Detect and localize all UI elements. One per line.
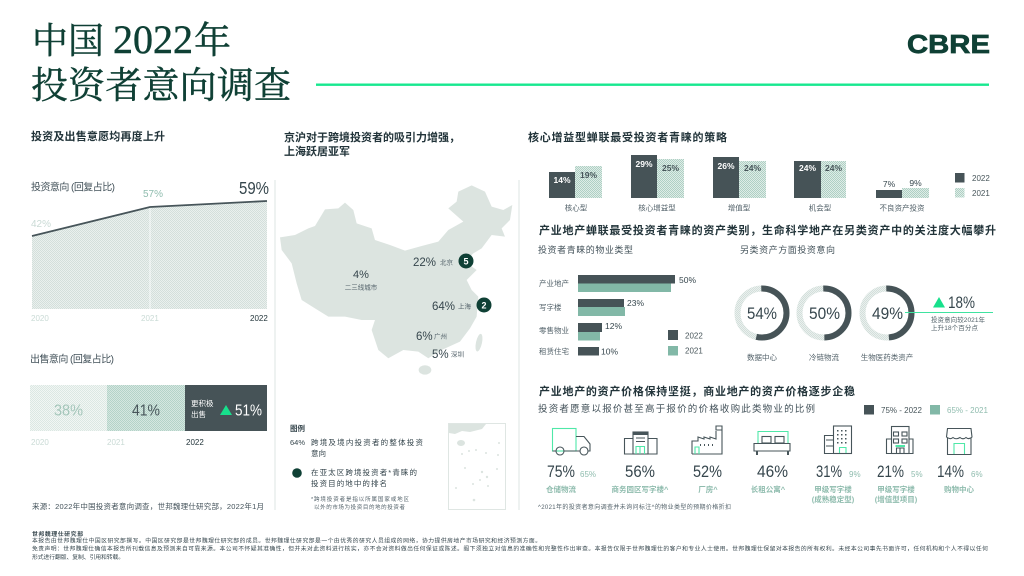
stat: grade A office core bbox=[812, 463, 861, 504]
bar chart: strategies: 9% bbox=[909, 178, 922, 188]
heading: map panel bbox=[284, 130, 460, 158]
icon: truck bbox=[552, 428, 590, 455]
subheading: alternative assets: 另类资产方面投资意向 bbox=[740, 244, 835, 255]
stat: factory: 厂房^ bbox=[698, 484, 718, 494]
map label: Beijing bbox=[413, 254, 474, 269]
map legend: 意向 bbox=[311, 448, 326, 458]
bar chart: property types: 产业地产 bbox=[539, 278, 569, 288]
bar chart: strategies: 25% bbox=[662, 163, 679, 173]
chart label: investment intent: 投资意向 (回复占比) bbox=[31, 180, 115, 194]
heading: asset classes: 产业地产蝉联最受投资者青睐的资产类别，生命科学地产在另类资产中的关注度大幅攀升 bbox=[539, 223, 996, 237]
legend: price discount: 65% - 2021 bbox=[947, 406, 988, 415]
donut: cold chain: 冷链物流 bbox=[809, 352, 839, 362]
panel: investment and sale intent bbox=[30, 129, 269, 447]
heading: investment and sale intent: 投资及出售意愿均再度上升 bbox=[31, 129, 165, 143]
segmented bar: sale intent: 2020 bbox=[31, 438, 49, 447]
callout: 18 percentage points: 18% bbox=[948, 294, 975, 312]
donut: life sciences: 生物医药类资产 bbox=[861, 352, 913, 362]
stat: business park office: 56% bbox=[625, 463, 655, 481]
legend: strategies bbox=[955, 173, 990, 198]
stat: warehouse bbox=[546, 463, 596, 494]
bar chart: strategies: 增值型 bbox=[728, 202, 751, 212]
map legend: 跨境及境内投资者的整体投资 bbox=[311, 437, 424, 447]
footer disclaimer: 形式进行翻版、复制、引用和转载。 bbox=[32, 553, 124, 561]
donut: data centre bbox=[738, 288, 786, 362]
stat: grade A office value-add: 5% bbox=[911, 470, 923, 479]
logo: CBRE: CBRE bbox=[907, 29, 990, 59]
stat: warehouse: 75% bbox=[547, 463, 575, 481]
icon: apartment bed bbox=[754, 432, 790, 455]
icon: shopping mall bbox=[946, 428, 972, 454]
bar chart: strategies: 核心型 bbox=[565, 202, 588, 212]
title: 2022 bbox=[113, 17, 193, 62]
segmented bar: sale intent: 41% bbox=[132, 402, 160, 420]
map legend bbox=[290, 423, 424, 511]
bar chart: strategies: 24% bbox=[825, 163, 842, 173]
stat: shopping mall: 6% bbox=[971, 470, 983, 479]
map label: Guangzhou: 6% bbox=[416, 331, 433, 343]
map label: tier 2/3 cities bbox=[345, 269, 378, 292]
map inset: South China Sea bbox=[448, 424, 506, 510]
callout: 18 percentage points: 上升18个百分点 bbox=[931, 323, 978, 332]
stat: long-stay apartment: 46% bbox=[757, 463, 788, 481]
area chart: investment intent bbox=[31, 178, 269, 323]
heading: price discount: 产业地产的资产价格保持坚挺，商业地产的资产价格逐步企稳 bbox=[539, 384, 855, 398]
area chart: investment intent: 42% bbox=[31, 219, 51, 230]
header rule bbox=[316, 84, 989, 86]
stat: grade A office core: 9% bbox=[849, 470, 861, 479]
legend: price discount: 75% - 2022 bbox=[881, 406, 922, 415]
source note: 来源：2022年中国投资者意向调查，世邦魏理仕研究部，2022年1月 bbox=[32, 501, 264, 511]
area chart: investment intent: 2020 bbox=[31, 314, 49, 323]
bar chart: strategies: 机会型 bbox=[809, 202, 832, 212]
segmented bar: sale intent: 2021 bbox=[107, 438, 125, 447]
area chart: investment intent: 2022 bbox=[250, 314, 268, 323]
panel: price discount bbox=[538, 384, 988, 511]
legend: strategies: 2021 bbox=[972, 189, 990, 198]
segmented bar: sale intent bbox=[30, 385, 267, 447]
stat: shopping mall bbox=[937, 463, 983, 494]
map legend: 投资目的地中的排名 bbox=[311, 478, 387, 488]
bar chart: strategies: 7% bbox=[883, 179, 896, 189]
bar chart: property types: 租赁住宅 bbox=[539, 346, 569, 356]
heading: strategies: 核心增益型蝉联最受投资者青睐的策略 bbox=[528, 130, 727, 144]
bar chart: property types: 12% bbox=[605, 321, 622, 331]
panel: asset classes bbox=[538, 223, 996, 362]
chart label: sale intent: 出售意向 (回复占比) bbox=[30, 352, 114, 366]
stat: business park office bbox=[612, 463, 669, 494]
map label: Guangzhou bbox=[416, 331, 447, 343]
title bbox=[31, 17, 291, 107]
map label: tier 2/3 cities: 二三线城市 bbox=[345, 282, 378, 292]
stat: warehouse: 仓储物流 bbox=[546, 484, 576, 494]
segmented bar: sale intent: 51% bbox=[235, 402, 262, 420]
map label: tier 2/3 cities: 4% bbox=[353, 269, 369, 281]
map label: Shenzhen: 5% bbox=[432, 349, 449, 361]
footer disclaimer: 免责声明：世邦魏理仕确信本报告所刊载信息及预测来自可靠来源。本公司不怀疑其准确性，但并未对此资料进行核实，亦不会对资料做出任何保证或陈述。阁下须独立对信息的准确性和完整性作出审查。本报告仅限于世邦魏理仕的客户和专业人士使用。世邦魏理仕保留对本报告的所有权利。未经本公司事先书面许可，任何机构和个人不得以任何 bbox=[32, 544, 988, 552]
map legend: 图例 bbox=[290, 423, 305, 433]
legend: strategies: 2022 bbox=[972, 174, 990, 183]
legend: property types: 2021 bbox=[685, 346, 703, 356]
bar chart: property types: 50% bbox=[679, 275, 696, 285]
map label: Beijing: 5 bbox=[463, 256, 469, 266]
bar chart: strategies: 24% bbox=[799, 163, 816, 173]
stat: grade A office core: 甲级写字楼 bbox=[814, 484, 852, 494]
panel: strategies bbox=[528, 130, 990, 212]
stat: factory bbox=[693, 463, 722, 494]
subheading: price discount: 投资者愿意以报价甚至高于报价的价格收购此类物业的比例 bbox=[538, 403, 815, 415]
bar chart: property types: 10% bbox=[601, 346, 618, 356]
stat: long-stay apartment bbox=[751, 463, 788, 494]
bar chart: strategies: 核心增益型 bbox=[638, 202, 676, 212]
callout: 18 percentage points bbox=[905, 294, 993, 332]
area chart: investment intent: 2021 bbox=[141, 314, 159, 323]
map label: Beijing: 北京 bbox=[440, 258, 454, 266]
stat: grade A office core: (成熟稳定型) bbox=[812, 494, 855, 504]
donut: life sciences: 49% bbox=[872, 305, 903, 323]
map label: Beijing: 22% bbox=[413, 257, 436, 269]
bar chart: strategies: 26% bbox=[717, 161, 735, 171]
bar chart: property types: 零售物业 bbox=[539, 325, 569, 335]
title: 投资者意向调查 bbox=[31, 65, 291, 107]
donut: cold chain: 50% bbox=[809, 305, 840, 323]
map label: Guangzhou: 广州 bbox=[434, 332, 447, 340]
stat: grade A office value-add bbox=[875, 463, 923, 504]
map label: Shanghai: 2 bbox=[481, 300, 487, 310]
bar chart: property types: 写字楼 bbox=[539, 302, 562, 312]
map label: Shenzhen: 深圳 bbox=[451, 350, 464, 358]
heading: map panel: 上海跃居亚军 bbox=[284, 144, 350, 158]
title: 中国 bbox=[32, 21, 104, 61]
bar chart: strategies: 不良资产投资 bbox=[880, 202, 925, 212]
callout: 18 percentage points: 投资意向较2021年 bbox=[931, 315, 986, 324]
stat: shopping mall: 购物中心 bbox=[944, 484, 974, 494]
icon: factory bbox=[692, 426, 722, 454]
legend: price discount bbox=[864, 405, 988, 415]
bar chart: strategies: 29% bbox=[635, 159, 653, 169]
map legend: 以外的市场为投资目的地的投资者 bbox=[314, 503, 405, 511]
segmented bar: sale intent: 38% bbox=[54, 402, 83, 420]
stat: grade A office value-add: 甲级写字楼 bbox=[877, 484, 915, 494]
area chart: investment intent: 59% bbox=[239, 178, 269, 198]
bar chart: strategies: 19% bbox=[580, 170, 597, 180]
stat: long-stay apartment: 长租公寓^ bbox=[751, 484, 786, 494]
icon: grade A office, core bbox=[824, 426, 852, 454]
legend: property types: 2022 bbox=[685, 332, 703, 340]
donut: cold chain bbox=[800, 288, 848, 362]
footnote: price discount: ^2021年的投资者意向调查并未询问标注^的物业类型的预期价格折扣 bbox=[538, 503, 731, 511]
heading: map panel: 京沪对于跨境投资者的吸引力增强， bbox=[284, 130, 460, 144]
bar chart: strategies bbox=[549, 155, 929, 212]
donut: life sciences bbox=[861, 288, 913, 362]
footer disclaimer: 世邦魏理仕研究部 bbox=[32, 530, 83, 538]
map label: Shanghai: 64% bbox=[432, 301, 455, 313]
area chart: investment intent: 57% bbox=[143, 189, 163, 200]
icon: grade A office, value-add bbox=[886, 426, 913, 454]
stat: shopping mall: 14% bbox=[937, 463, 964, 481]
panel: map of cross-border appeal bbox=[280, 130, 512, 511]
legend: property types bbox=[668, 330, 703, 356]
bar chart: strategies: 14% bbox=[553, 175, 571, 185]
bar chart: property types bbox=[539, 275, 696, 356]
footer disclaimer: 本报告由世邦魏理仕中国区研究部撰写。中国区研究部是世邦魏理仕研究部的成员。世邦魏理仕研究部是一个由优秀的研究人员组成的网络，协力提供房地产市场研究和经济预测方面。 bbox=[32, 536, 541, 544]
subheading: property types: 投资者青睐的物业类型 bbox=[538, 244, 633, 255]
segmented bar: sale intent: 2022 bbox=[186, 438, 204, 447]
title: 年 bbox=[194, 20, 231, 62]
stat: factory: 52% bbox=[693, 463, 722, 481]
stat: warehouse: 65% bbox=[580, 470, 596, 479]
bar chart: strategies: 24% bbox=[744, 163, 761, 173]
map legend: 64% bbox=[290, 438, 305, 447]
segmented bar: sale intent: 更积极 bbox=[191, 398, 214, 408]
map legend: *跨境投资者是指以所属国家或地区 bbox=[311, 495, 409, 503]
donut: data centre: 数据中心 bbox=[747, 352, 777, 362]
footer disclaimer bbox=[32, 530, 988, 561]
map: China bbox=[280, 185, 512, 375]
stat: business park office: 商务园区写字楼^ bbox=[612, 484, 669, 494]
segmented bar: sale intent: 出售 bbox=[191, 409, 206, 419]
stat: grade A office value-add: (增值型项目) bbox=[875, 494, 918, 504]
map label: Shanghai bbox=[432, 298, 492, 313]
bar chart: property types: 23% bbox=[627, 298, 644, 308]
map label: Shenzhen bbox=[432, 349, 464, 361]
stat: grade A office core: 31% bbox=[816, 463, 842, 481]
map legend: 在亚太区跨境投资者*青睐的 bbox=[311, 467, 417, 477]
donut: data centre: 54% bbox=[747, 305, 777, 323]
icon: business park office bbox=[624, 432, 657, 454]
map label: Shanghai: 上海 bbox=[458, 302, 472, 310]
stat: grade A office value-add: 21% bbox=[877, 463, 904, 481]
